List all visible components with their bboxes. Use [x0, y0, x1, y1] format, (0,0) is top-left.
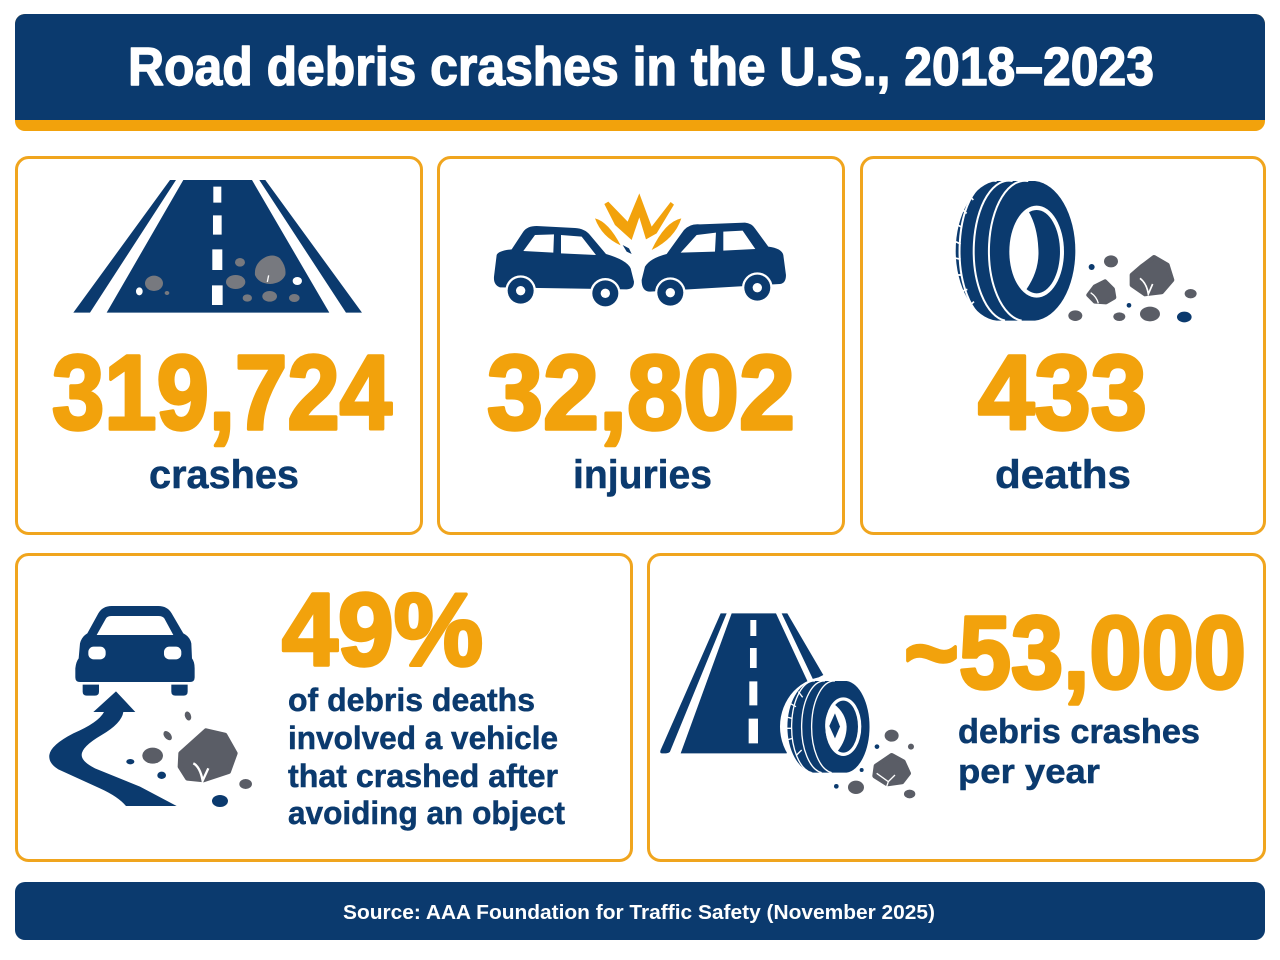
icon: road, tire and rocks — [660, 613, 915, 798]
number: crashes: 319,724 — [52, 334, 392, 452]
number: deaths: 433 — [978, 334, 1147, 452]
icon: road with debris — [73, 180, 362, 313]
text: description: involved a vehicle — [288, 720, 558, 756]
text: debris crashes per year: per year — [958, 753, 1100, 791]
title banner — [15, 14, 1265, 131]
panel: avoidance deaths — [16, 554, 632, 860]
burst — [595, 193, 681, 250]
label: injuries: injuries — [573, 453, 712, 497]
text: description: of debris deaths — [288, 682, 535, 718]
panel: crashes per year — [648, 554, 1264, 860]
number: 49%: 49% — [282, 572, 483, 687]
text: description: avoiding an object — [288, 795, 565, 831]
panel: injuries — [438, 158, 844, 534]
label: deaths: deaths — [995, 453, 1131, 497]
number: injuries: 32,802 — [487, 334, 795, 452]
icon: two cars colliding — [494, 193, 786, 309]
source footer — [15, 882, 1265, 940]
panel: crashes — [16, 158, 422, 534]
text: debris crashes per year: debris crashes — [958, 713, 1200, 751]
text: debris crashes per year — [958, 713, 1200, 791]
number: ~53,000: ~53,000 — [904, 595, 1246, 710]
text: description — [288, 682, 565, 831]
icon: car swerving around rock — [49, 606, 252, 807]
text: description: that crashed after — [288, 758, 558, 794]
icon: tire with rocks — [952, 181, 1197, 322]
source text: Source: AAA Foundation for Traffic Safety (November 2025) — [343, 902, 935, 924]
title: Road debris crashes in the U.S., 2018–2023 — [128, 37, 1154, 97]
label: crashes: crashes — [149, 453, 299, 497]
panel: deaths — [862, 158, 1264, 534]
